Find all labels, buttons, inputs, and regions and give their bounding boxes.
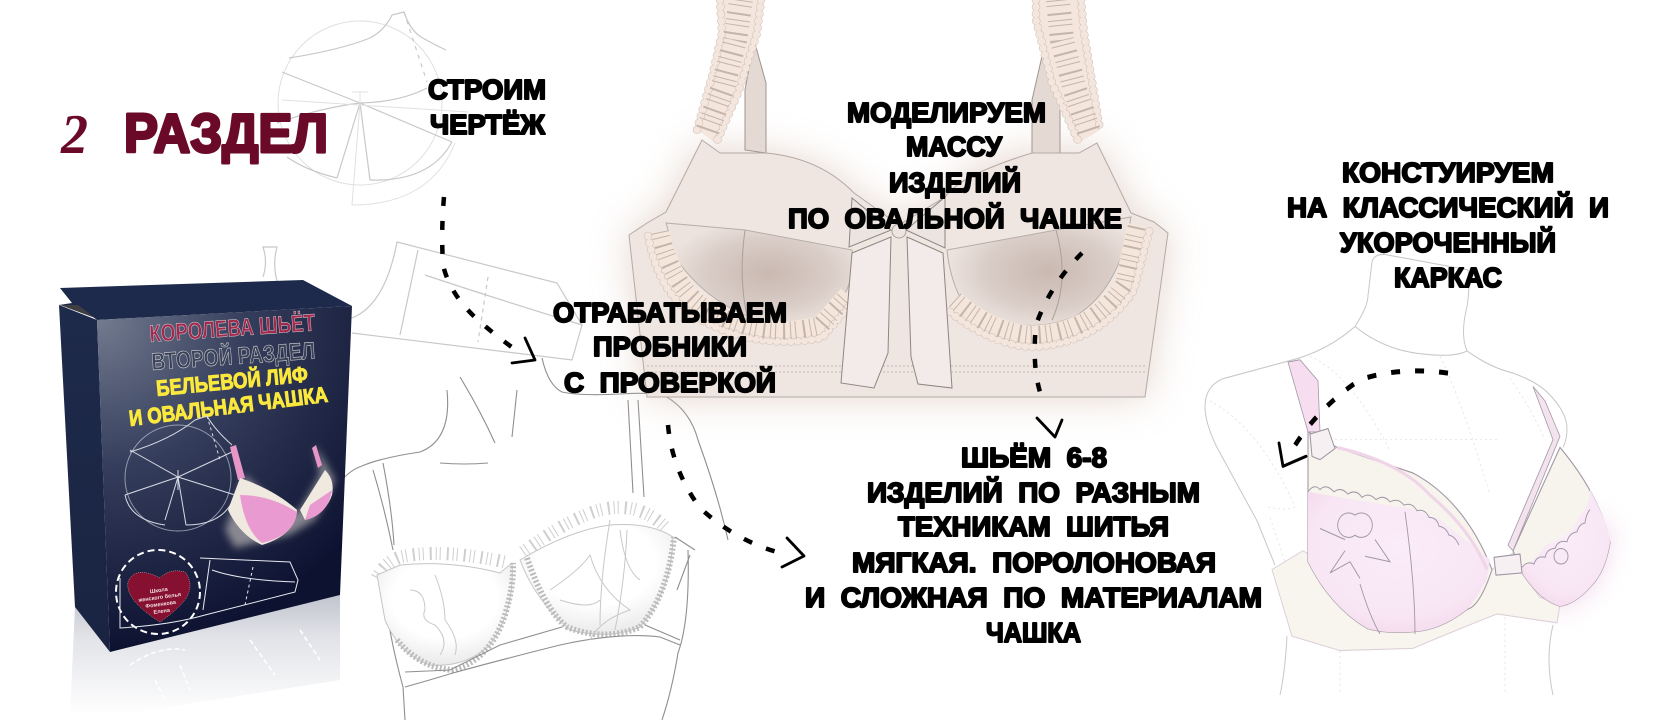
label: modelling: МОДЕЛИРУЕМ: [847, 97, 1046, 128]
label: sewing: И СЛОЖНАЯ ПО МАТЕРИАЛАМ: [805, 582, 1262, 613]
heart text: женского белья: [137, 591, 182, 604]
ruffle left: [697, 0, 761, 143]
box construction drawing: [125, 416, 235, 531]
label: modelling: ПО ОВАЛЬНОЙ ЧАШКЕ: [788, 202, 1122, 234]
arrow: modelling to sewing: [1035, 253, 1082, 437]
label: constructing: УКОРОЧЕННЫЙ: [1340, 226, 1556, 258]
label: samples: С ПРОВЕРКОЙ: [564, 366, 776, 398]
label: constructing: КАРКАС: [1394, 262, 1502, 293]
arrow: draft to samples: [442, 197, 535, 363]
left cup pink: [1308, 492, 1490, 632]
left lace motif: [1308, 487, 1459, 634]
box side: [59, 305, 110, 652]
left cup: [377, 563, 512, 665]
underwire bands: [397, 537, 674, 670]
heart text: Елена: [153, 608, 171, 616]
box title: oval cup: И ОВАЛЬНАЯ ЧАШКА: [128, 382, 329, 431]
lower cup ruffles: [648, 225, 1150, 347]
bow knot: [892, 224, 906, 238]
right cup pink: [1522, 490, 1610, 606]
straps: [1288, 360, 1320, 432]
bra body: [629, 140, 1168, 397]
box reflection: [70, 595, 340, 715]
band: [1272, 551, 1560, 651]
right cup: [947, 217, 1131, 325]
label: modelling: [788, 97, 1122, 234]
panel: centre beige bra: [629, 0, 1168, 397]
strap left: [745, 40, 766, 153]
right flower: [1522, 510, 1590, 567]
section title: РАЗДЕЛ: [124, 102, 328, 164]
pink glow: [1530, 506, 1612, 612]
centre bow: [1494, 554, 1522, 575]
soft glow: [629, 140, 1168, 397]
label: modelling: ИЗДЕЛИЙ: [889, 166, 1021, 198]
left cup edge pink trim: [1337, 447, 1487, 570]
box title: lingerie bodice: БЕЛЬЕВОЙ ЛИФ: [155, 362, 309, 401]
right cup: [520, 524, 673, 634]
left cup: [1308, 432, 1492, 632]
pattern piece outline: [263, 242, 582, 360]
lace fringe: [377, 508, 668, 578]
label: modelling: МАССУ: [906, 131, 1003, 162]
label: build the draft: ЧЕРТЁЖ: [430, 109, 546, 140]
arrow: constructing to bra: [1279, 371, 1448, 466]
strap right: [1032, 43, 1060, 153]
label: samples: [553, 297, 787, 398]
dashed circle badge: [116, 550, 200, 634]
label: constructing: НА КЛАССИЧЕСКИЙ И: [1287, 191, 1609, 223]
heart badge: [128, 571, 190, 622]
label: sewing: ИЗДЕЛИЙ ПО РАЗНЫМ: [867, 476, 1200, 508]
box top flap: [59, 280, 352, 320]
box title: school name: КОРОЛЕВА ШЬЁТ: [149, 309, 316, 348]
bow wings: [849, 197, 945, 248]
box title: section: ВТОРОЙ РАЗДЕЛ: [150, 337, 316, 376]
product box: [59, 280, 352, 652]
sketch bra: [377, 508, 695, 687]
label: samples: ПРОБНИКИ: [593, 331, 747, 362]
label: sewing: ШЬЁМ 6-8: [961, 442, 1107, 473]
label: sewing: МЯГКАЯ. ПОРОЛОНОВАЯ: [852, 547, 1216, 578]
arrow: samples to sewing: [668, 425, 804, 567]
box front: [97, 306, 352, 652]
label: sewing: ЧАШКА: [986, 617, 1081, 648]
bow tails: [841, 237, 952, 388]
left cup: [666, 223, 852, 324]
heart text: Фоменкова: [145, 600, 177, 610]
label: build the draft: СТРОИМ: [428, 74, 546, 105]
panel: right pink bra: [1272, 360, 1612, 651]
label: build the draft: [428, 74, 546, 140]
label: samples: ОТРАБАТЫВАЕМ: [553, 297, 787, 328]
mannequin outline: [1205, 254, 1567, 695]
construction drawing (top): [277, 12, 468, 205]
outline body sketch: [340, 358, 728, 720]
label: sewing: ТЕХНИКАМ ШИТЬЯ: [898, 511, 1169, 542]
heart text: Школа: [150, 587, 168, 595]
heading: [60, 102, 328, 166]
strap bow: [1310, 429, 1335, 460]
ruffle right: [1036, 0, 1100, 143]
lace motif: [410, 520, 640, 655]
label: constructing: [1287, 157, 1609, 293]
box mini bra: [225, 445, 335, 548]
label: constructing: КОНСТУИРУЕМ: [1342, 157, 1554, 188]
right cup: [1513, 447, 1610, 606]
label: sewing: [805, 442, 1262, 648]
section number: 2: [60, 104, 88, 166]
box pattern outline: [120, 558, 298, 628]
stitching: [647, 366, 1145, 372]
